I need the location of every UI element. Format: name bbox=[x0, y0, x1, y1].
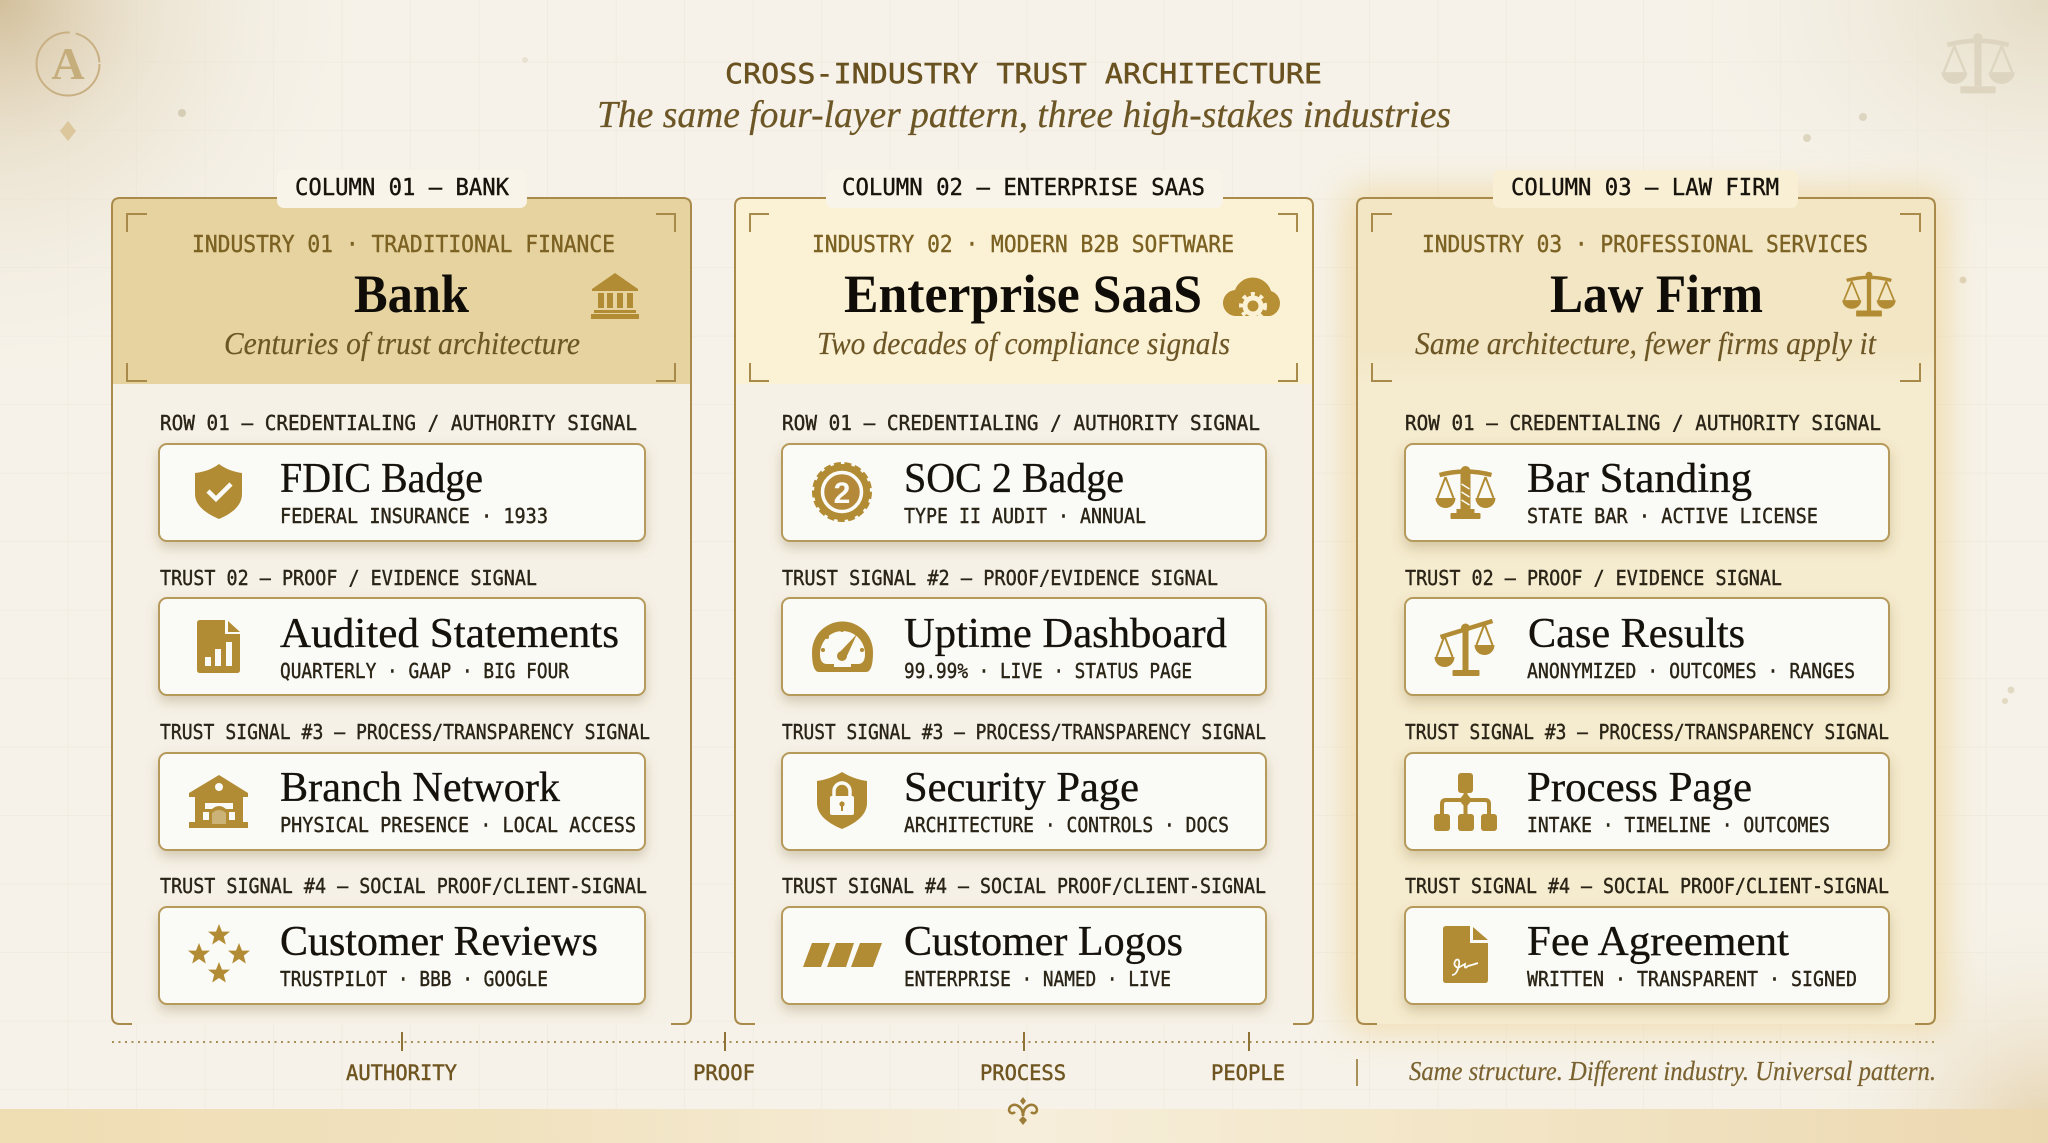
logo: A monogram bbox=[36, 32, 100, 96]
card: Customer Logos: Customer Logos bbox=[904, 919, 1183, 965]
icon: numbered seal: 2 bbox=[834, 477, 850, 510]
header: enterprise saas: Enterprise SaaS bbox=[844, 264, 1202, 324]
icon: scales of justice bbox=[1842, 272, 1896, 316]
card: Audited Statements: Audited Statements bbox=[280, 611, 619, 657]
header: bank: Bank bbox=[354, 264, 469, 324]
card: Process Page: INTAKE · TIMELINE · OUTCOMES bbox=[1527, 813, 1830, 837]
axis: four layers bbox=[112, 1032, 1936, 1085]
card: Bar Standing bbox=[1405, 444, 1889, 541]
card: Customer Reviews: Customer Reviews bbox=[280, 919, 598, 965]
panel: enterprise saas bbox=[735, 170, 1313, 1024]
icon: bank building bbox=[591, 273, 639, 319]
icon: logo blocks bbox=[803, 943, 882, 967]
subtitle: The same four-layer pattern, three high-stakes industries bbox=[597, 94, 1451, 136]
card: Security Page: Security Page bbox=[904, 765, 1139, 811]
icon: numbered seal bbox=[814, 464, 870, 520]
icon: gauge bbox=[812, 622, 873, 672]
row 4 label: TRUST SIGNAL #4 — SOCIAL PROOF/CLIENT-SIGNAL bbox=[782, 874, 1266, 898]
card: Customer Reviews bbox=[159, 907, 645, 1004]
card: Customer Logos: ENTERPRISE · NAMED · LIVE bbox=[904, 967, 1171, 991]
icon: tilted scales bbox=[1434, 621, 1494, 676]
header: bank: Centuries of trust architecture bbox=[224, 325, 580, 361]
column tab: bank: COLUMN 01 — BANK bbox=[295, 175, 509, 201]
card: FDIC Badge: FDIC Badge bbox=[280, 456, 483, 502]
column tab: enterprise saas bbox=[826, 170, 1223, 208]
card: Fee Agreement: Fee Agreement bbox=[1527, 919, 1789, 965]
card: Case Results bbox=[1405, 598, 1889, 695]
row 4 label: TRUST SIGNAL #4 — SOCIAL PROOF/CLIENT-SIGNAL bbox=[160, 874, 647, 898]
axis: four layers: PEOPLE bbox=[1211, 1061, 1285, 1085]
header: law firm: Same architecture, fewer firms apply it bbox=[1415, 325, 1877, 361]
title: CROSS-INDUSTRY TRUST ARCHITECTURE bbox=[725, 57, 1322, 90]
row 1 label: ROW 01 — CREDENTIALING / AUTHORITY SIGNAL bbox=[1405, 411, 1881, 435]
header: bank: INDUSTRY 01 · TRADITIONAL FINANCE bbox=[192, 232, 615, 258]
axis: four layers: AUTHORITY bbox=[346, 1061, 457, 1085]
card: Customer Logos bbox=[782, 907, 1266, 1004]
header: law firm: INDUSTRY 03 · PROFESSIONAL SERVICES bbox=[1422, 232, 1868, 258]
header: bank bbox=[113, 199, 690, 384]
ornament bbox=[1009, 1097, 1037, 1125]
row 1 label: ROW 01 — CREDENTIALING / AUTHORITY SIGNAL bbox=[160, 411, 637, 435]
icon: lock shield bbox=[817, 772, 867, 829]
icon: document chart bbox=[197, 620, 240, 673]
column tab: law firm bbox=[1493, 170, 1798, 208]
header: enterprise saas: INDUSTRY 02 · MODERN B2B SOFTWARE bbox=[812, 232, 1234, 258]
row 3 label: TRUST SIGNAL #3 — PROCESS/TRANSPARENCY SIGNAL bbox=[1405, 720, 1889, 744]
header: enterprise saas: Two decades of compliance signals bbox=[817, 325, 1230, 361]
card: Uptime Dashboard: Uptime Dashboard bbox=[904, 611, 1227, 657]
column tab: law firm: COLUMN 03 — LAW FIRM bbox=[1511, 175, 1779, 201]
row 2 label: TRUST 02 — PROOF / EVIDENCE SIGNAL bbox=[1405, 566, 1782, 590]
row 2 label: TRUST SIGNAL #2 — PROOF/EVIDENCE SIGNAL bbox=[782, 566, 1218, 590]
panel: law firm bbox=[1345, 170, 1947, 1030]
card: Branch Network: Branch Network bbox=[280, 765, 560, 811]
card: Branch Network: PHYSICAL PRESENCE · LOCAL ACCESS bbox=[280, 813, 636, 837]
header: law firm bbox=[1358, 199, 1934, 384]
row 4 label: TRUST SIGNAL #4 — SOCIAL PROOF/CLIENT-SIGNAL bbox=[1405, 874, 1889, 898]
icon: cloud gear bbox=[1223, 278, 1280, 318]
icon: shield check bbox=[195, 464, 242, 519]
column tab: enterprise saas: COLUMN 02 — ENTERPRISE SAAS bbox=[842, 175, 1205, 201]
card: Branch Network bbox=[159, 753, 645, 850]
axis: four layers: PROOF bbox=[693, 1061, 755, 1085]
card: Uptime Dashboard: 99.99% · LIVE · STATUS PAGE bbox=[904, 659, 1192, 683]
divider bbox=[1356, 1059, 1358, 1086]
card: Bar Standing: STATE BAR · ACTIVE LICENSE bbox=[1527, 504, 1818, 528]
watermark: scales bbox=[1941, 33, 2015, 93]
decorative diamond bbox=[60, 121, 76, 141]
icon: signed document bbox=[1443, 926, 1488, 983]
card: Process Page: Process Page bbox=[1527, 765, 1752, 811]
row 2 label: TRUST 02 — PROOF / EVIDENCE SIGNAL bbox=[160, 566, 537, 590]
card: Uptime Dashboard bbox=[782, 598, 1266, 695]
panel: bank bbox=[112, 170, 691, 1024]
row 3 label: TRUST SIGNAL #3 — PROCESS/TRANSPARENCY SIGNAL bbox=[782, 720, 1266, 744]
icon: stars bbox=[188, 924, 250, 982]
card: Customer Reviews: TRUSTPILOT · BBB · GOOGLE bbox=[280, 967, 548, 991]
card: Bar Standing: Bar Standing bbox=[1527, 456, 1752, 502]
card: Fee Agreement: WRITTEN · TRANSPARENT · SIGNED bbox=[1527, 967, 1857, 991]
card: FDIC Badge bbox=[159, 444, 645, 541]
axis: four layers: PROCESS bbox=[980, 1061, 1066, 1085]
card: FDIC Badge: FEDERAL INSURANCE · 1933 bbox=[280, 504, 548, 528]
column tab: bank bbox=[277, 170, 527, 208]
card: Audited Statements bbox=[159, 598, 645, 695]
card: Security Page bbox=[782, 753, 1266, 850]
card: SOC 2 Badge bbox=[782, 444, 1266, 541]
card: SOC 2 Badge: SOC 2 Badge bbox=[904, 456, 1124, 502]
icon: process chart bbox=[1434, 773, 1497, 831]
card: Fee Agreement bbox=[1405, 907, 1889, 1004]
icon: twisted pillar scales bbox=[1436, 466, 1496, 519]
header: law firm: Law Firm bbox=[1550, 264, 1763, 324]
card: Case Results: Case Results bbox=[1528, 611, 1745, 657]
card: SOC 2 Badge: TYPE II AUDIT · ANNUAL bbox=[904, 504, 1146, 528]
icon: branch building bbox=[189, 775, 248, 828]
card: Process Page bbox=[1405, 753, 1889, 850]
card: Audited Statements: QUARTERLY · GAAP · BIG FOUR bbox=[280, 659, 570, 683]
row 3 label: TRUST SIGNAL #3 — PROCESS/TRANSPARENCY SIGNAL bbox=[160, 720, 650, 744]
logo: A monogram: A bbox=[51, 38, 85, 89]
card: Security Page: ARCHITECTURE · CONTROLS · DOCS bbox=[904, 813, 1229, 837]
card: Case Results: ANONYMIZED · OUTCOMES · RANGES bbox=[1527, 659, 1855, 683]
header: enterprise saas bbox=[736, 199, 1312, 384]
closing statement: Same structure. Different industry. Universal pattern. bbox=[1409, 1056, 1936, 1086]
row 1 label: ROW 01 — CREDENTIALING / AUTHORITY SIGNAL bbox=[782, 411, 1260, 435]
bottom band bbox=[0, 1109, 2048, 1143]
